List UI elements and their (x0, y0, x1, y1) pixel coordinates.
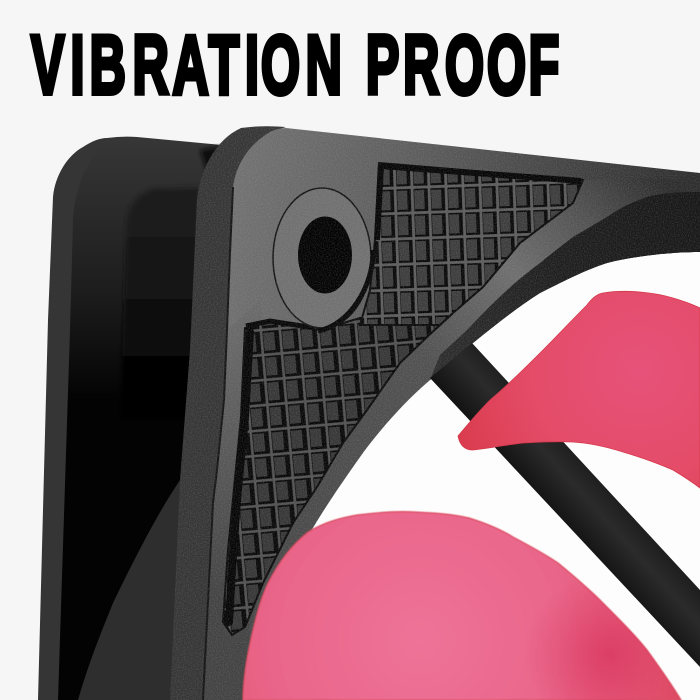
fan strut (430, 343, 700, 667)
textured grip pad: lower (223, 313, 453, 635)
title: VIBRATION PROOF (31, 18, 559, 112)
fan opening: white interior (240, 235, 700, 700)
textured grip pad: upper (360, 163, 583, 325)
dark curved inner wall of frame opening (430, 192, 700, 380)
front frame face (203, 128, 700, 700)
mounting screw hole (298, 216, 352, 294)
frame surface grain (170, 125, 700, 700)
lower fan blade (243, 512, 681, 700)
back frame of fan (38, 137, 222, 700)
mounting screw washer (273, 188, 373, 331)
upper fan blade (458, 291, 700, 488)
front frame side face (170, 126, 286, 700)
lit bevel along frame opening (243, 178, 700, 700)
